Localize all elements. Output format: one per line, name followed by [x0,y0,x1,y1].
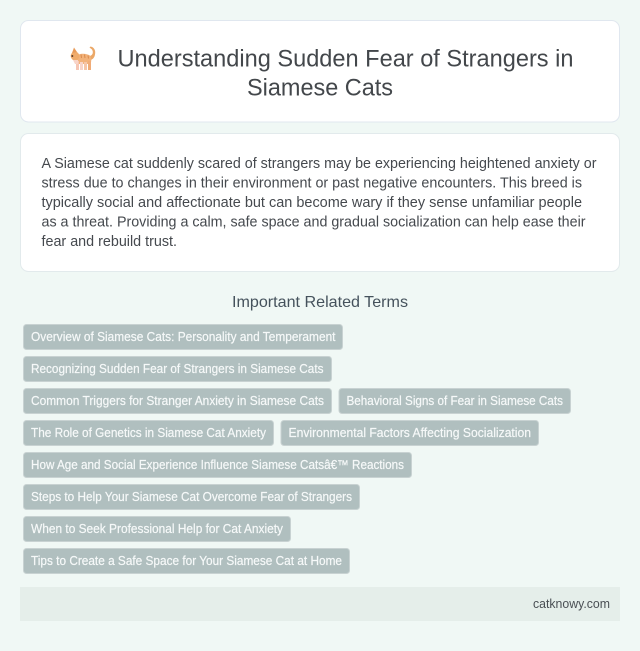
title [118,46,574,102]
tag: recognizing [24,356,332,382]
panel: title card [20,20,620,122]
tag: triggers: Common Triggers for Stranger Anxiety in Siamese Cats [31,394,324,408]
tag: behavioral signs: Behavioral Signs of Fear in Siamese Cats [346,394,563,408]
tag: safe space: Tips to Create a Safe Space for Your Siamese Cat at Home [31,554,342,568]
title: Understanding Sudden Fear of Strangers in [118,46,574,72]
footer [20,587,620,621]
tag list [24,324,570,574]
tag: age and experience: How Age and Social Experience Influence Siamese Catsâ€™ Reactions [31,458,404,472]
panel: summary text: typically social and affectionate but can become wary if they sense unfamiliar people [42,194,582,211]
tag: genetics [24,420,274,446]
panel: summary text: A Siamese cat suddenly scared of strangers may be experiencing heightened anxiety or [42,155,597,172]
panel: summary text: as a threat. Providing a calm, safe space and gradual socialization can help ease their [42,214,586,230]
heading: related terms: Important Related Terms [232,294,408,311]
tag: triggers [24,388,332,414]
tag: overview [24,324,342,350]
panel: summary text [20,134,620,272]
tag: steps: Steps to Help Your Siamese Cat Overcome Fear of Strangers [31,490,352,504]
tag: overview: Overview of Siamese Cats: Personality and Temperament [31,330,336,344]
tag: genetics: The Role of Genetics in Siamese Cat Anxiety [31,426,267,440]
panel: summary text: stress due to changes in their environment or past negative encounters. This breed is [42,174,582,192]
tag: environmental: Environmental Factors Affecting Socialization [288,426,531,440]
tag: age and experience [24,452,412,478]
tag: behavioral signs [339,388,570,414]
tag: steps [24,484,360,510]
footer: catknowy.com [533,597,610,611]
tag: professional help [24,516,290,542]
panel: summary text: fear and rebuild trust. [42,233,177,250]
icon: cat [71,46,95,70]
tag: safe space [24,548,350,574]
tag: recognizing: Recognizing Sudden Fear of Strangers in Siamese Cats [31,362,324,376]
title: Siamese Cats [247,74,393,102]
tag: environmental [281,420,538,446]
tag: professional help: When to Seek Professional Help for Cat Anxiety [31,522,284,536]
